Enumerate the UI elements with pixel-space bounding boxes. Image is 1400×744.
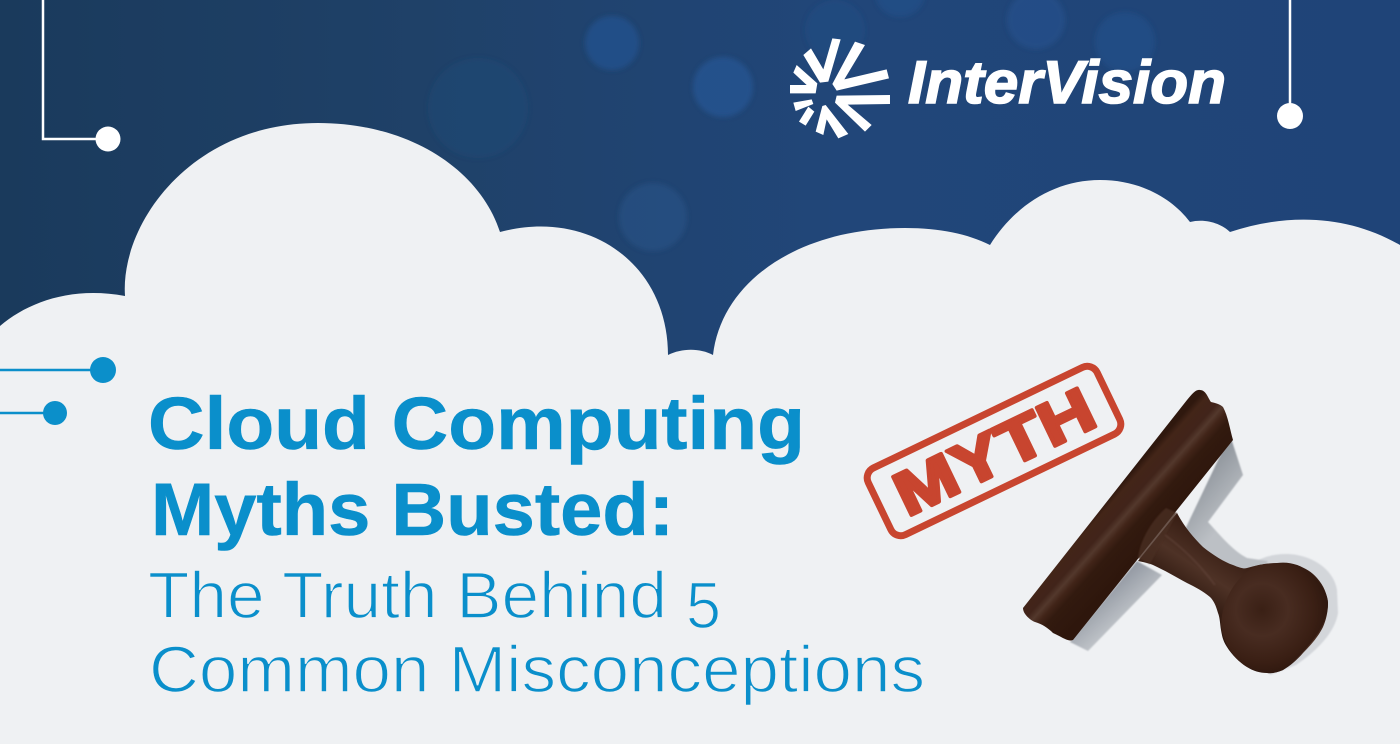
connector: top-left line and dot — [43, 0, 120, 152]
stamp knob shading — [1221, 563, 1328, 673]
title line 1: Cloud Computing — [148, 382, 805, 465]
stamp shadow — [1070, 435, 1338, 675]
logo: InterVision — [790, 38, 1226, 138]
connector: top-right line and dot — [1277, 0, 1303, 129]
wood grain highlight — [1165, 535, 1215, 585]
connector: lower blue line and dot — [0, 401, 67, 425]
rubber stamp — [1023, 390, 1338, 675]
stamp block — [1023, 390, 1233, 640]
logo icon: starburst — [790, 38, 890, 138]
title line 2: Myths Busted: — [151, 468, 674, 551]
logo wordmark: InterVision — [908, 49, 1226, 116]
connector: upper blue line and dot — [0, 357, 116, 383]
stamp imprint: MYTH: MYTH — [883, 375, 1106, 530]
subtitle line 2: Common Misconceptions — [149, 632, 925, 706]
title — [148, 382, 805, 551]
stamp handle and knob — [1138, 513, 1328, 673]
background: navy sky — [0, 0, 1400, 400]
subtitle — [148, 558, 925, 706]
handle join highlight — [1138, 508, 1177, 564]
subtitle line 1: The Truth Behind — [148, 558, 667, 632]
subtitle line 1: 5 — [686, 568, 721, 642]
bokeh circles — [428, 0, 1155, 251]
stamp imprint: MYTH — [864, 363, 1124, 539]
